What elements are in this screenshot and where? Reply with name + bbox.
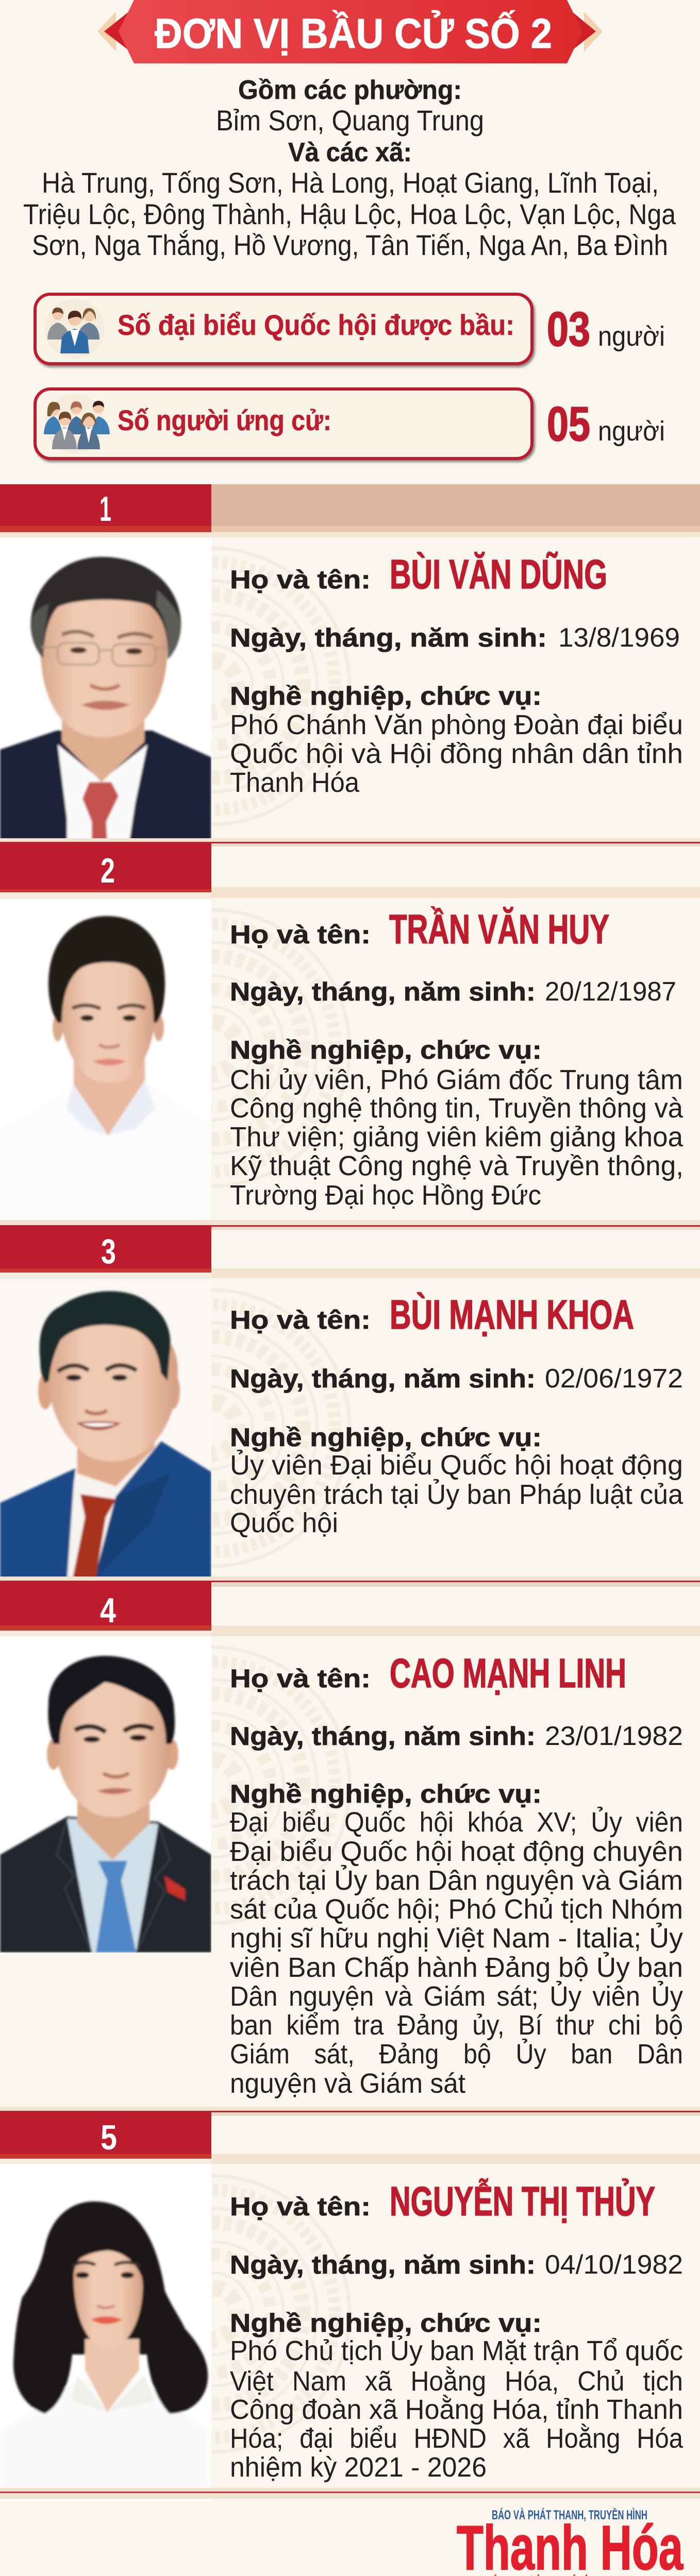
panel: candidate 2 details: Kỹ thuật Công nghệ và Truyền thông, xyxy=(230,1150,684,1181)
panel: candidate 5 details: 04/10/1982 xyxy=(545,2250,683,2280)
panel: candidate 3 details: Ủy viên Đại biểu Quốc hội hoạt động xyxy=(230,1450,683,1481)
candidate 5 number bar: 5 xyxy=(101,2118,117,2157)
candidate 4 number bar: 4 xyxy=(100,1591,116,1630)
panel: candidate 4 details: trách tại Ủy ban Dân nguyện và Giám xyxy=(230,1865,683,1896)
panel: candidate 3 details: Ngày, tháng, năm sinh: xyxy=(230,1364,536,1393)
icon: five candidates xyxy=(44,394,110,453)
panel: candidate 1 details: 13/8/1969 xyxy=(558,623,680,653)
panel: candidate 1 details: Ngày, tháng, năm sinh: xyxy=(230,623,547,652)
panel: candidate 2 details: TRẦN VĂN HUY xyxy=(389,906,609,952)
callout label: Số người ứng cử: xyxy=(118,404,331,436)
callout: number of candidates xyxy=(35,389,532,459)
panel: candidate 2 details: Ngày, tháng, năm sinh: xyxy=(230,977,536,1006)
panel: candidate 4 details: nghị sĩ hữu nghị Việt Nam - Italia; Ủy xyxy=(230,1923,683,1954)
panel: candidate 4 xyxy=(0,1636,683,2099)
candidate 5 number bar xyxy=(0,2107,700,2164)
text block: wards and communes: Gồm các phường: xyxy=(238,75,462,105)
text block: wards and communes: Bỉm Sơn, Quang Trung xyxy=(216,104,484,137)
value: 05 people xyxy=(547,397,665,451)
title banner xyxy=(97,0,603,63)
panel: candidate 2 details: Chi ủy viên, Phó Giám đốc Trung tâm xyxy=(230,1064,683,1095)
panel: candidate 5 details: Họ và tên: xyxy=(230,2192,371,2221)
icon: three delegates xyxy=(45,299,105,359)
panel: candidate 3 details xyxy=(211,1288,684,1568)
candidate 1 number bar: 1 xyxy=(99,489,111,529)
value: 03 people: người xyxy=(598,321,665,352)
panel: candidate 4 details xyxy=(211,1646,683,2098)
panel: candidate 2 details xyxy=(211,906,684,1210)
value: 05 people: người xyxy=(598,416,665,447)
panel: candidate 3 details: Họ và tên: xyxy=(230,1306,371,1334)
panel: candidate 1 xyxy=(0,537,683,841)
panel: candidate 2 details: 20/12/1987 xyxy=(545,977,676,1007)
photo: candidate 4 portrait xyxy=(0,1636,211,1953)
footer rule xyxy=(0,2488,700,2501)
callout label: Số đại biểu Quốc hội được bầu: xyxy=(118,309,514,341)
panel: candidate 4 details: 23/01/1982 xyxy=(545,1721,683,1751)
candidate 3 number bar: 3 xyxy=(101,1232,116,1271)
panel: candidate 3 details: 02/06/1972 xyxy=(545,1364,683,1394)
text block: wards and communes: Và các xã: xyxy=(288,138,412,167)
panel: candidate 5 details: Phó Chủ tịch Ủy ban Mặt trận Tổ quốc xyxy=(230,2335,683,2366)
text block: wards and communes xyxy=(23,75,676,261)
panel: candidate 2 details: Họ và tên: xyxy=(230,920,371,949)
panel: candidate 2 details: Nghề nghiệp, chức vụ: xyxy=(230,1036,542,1064)
panel: candidate 3 details: Quốc hội xyxy=(230,1507,338,1538)
panel: candidate 5 details xyxy=(211,2174,683,2482)
candidate 4 number bar xyxy=(0,1577,700,1636)
photo: candidate 2 portrait xyxy=(0,899,211,1220)
candidate 3 number bar xyxy=(0,1220,700,1279)
panel: candidate 4 details: viên Ban Chấp hành Đảng bộ Ủy ban xyxy=(230,1952,683,1983)
panel: candidate 5 details: nhiệm kỳ 2021 - 2026 xyxy=(230,2452,487,2483)
panel: candidate 2 details: Công nghệ thông tin, Truyền thông và xyxy=(230,1093,684,1124)
panel: candidate 4 details: sát của Quốc hội; Phó Chủ tịch Nhóm xyxy=(230,1894,683,1925)
panel: candidate 1 details: Thanh Hóa xyxy=(230,767,360,798)
callout: number of deputies xyxy=(35,294,532,364)
panel: candidate 2 details: Thư viện; giảng viên kiêm giảng khoa xyxy=(230,1122,684,1153)
panel: candidate 5 details: Nghề nghiệp, chức vụ: xyxy=(230,2309,542,2337)
photo: candidate 3 portrait xyxy=(0,1279,211,1581)
panel: candidate 5 details: Công đoàn xã Hoằng Hóa, tỉnh Thanh xyxy=(230,2394,683,2425)
panel: candidate 1 details: Phó Chánh Văn phòng Đoàn đại biểu xyxy=(230,709,683,740)
panel: candidate 2 details: Trường Đại học Hồng Đức xyxy=(230,1180,541,1211)
panel: candidate 4 details: Nghề nghiệp, chức vụ: xyxy=(230,1780,542,1808)
panel: candidate 4 details: nguyện và Giám sát xyxy=(230,2068,465,2099)
candidate 1 number bar xyxy=(0,484,700,537)
panel: candidate 4 details: Họ và tên: xyxy=(230,1664,371,1693)
title text: ĐƠN VỊ BẦU CỬ SỐ 2 xyxy=(155,10,552,57)
photo: candidate 1 portrait xyxy=(0,537,211,841)
panel: candidate 1 details xyxy=(211,546,681,826)
candidate 2 number bar: 2 xyxy=(101,851,115,890)
value: 03 people: 03 xyxy=(547,302,590,356)
panel: candidate 5 details: Ngày, tháng, năm sinh: xyxy=(230,2250,536,2279)
panel: candidate 2 xyxy=(0,899,684,1220)
panel: candidate 1 details: BÙI VĂN DŨNG xyxy=(390,551,607,597)
panel: candidate 1 details: Nghề nghiệp, chức vụ: xyxy=(230,682,542,710)
panel: candidate 3 details: chuyên trách tại Ủy ban Pháp luật của xyxy=(230,1479,684,1510)
value: 03 people xyxy=(547,302,665,356)
panel: candidate 3 details: Nghề nghiệp, chức vụ: xyxy=(230,1423,542,1452)
panel: candidate 5 xyxy=(0,2164,684,2489)
panel: candidate 1 details: Quốc hội và Hội đồng nhân dân tỉnh xyxy=(230,738,683,769)
panel: candidate 1 details: Họ và tên: xyxy=(230,565,371,594)
panel: candidate 3 xyxy=(0,1279,684,1581)
value: 05 people: 05 xyxy=(547,397,590,451)
panel: candidate 4 details: Ngày, tháng, năm sinh: xyxy=(230,1722,536,1751)
panel: candidate 4 details: Đại biểu Quốc hội hoạt động chuyên xyxy=(230,1836,683,1867)
photo: candidate 5 portrait xyxy=(0,2164,211,2489)
candidate 2 number bar xyxy=(0,838,700,899)
